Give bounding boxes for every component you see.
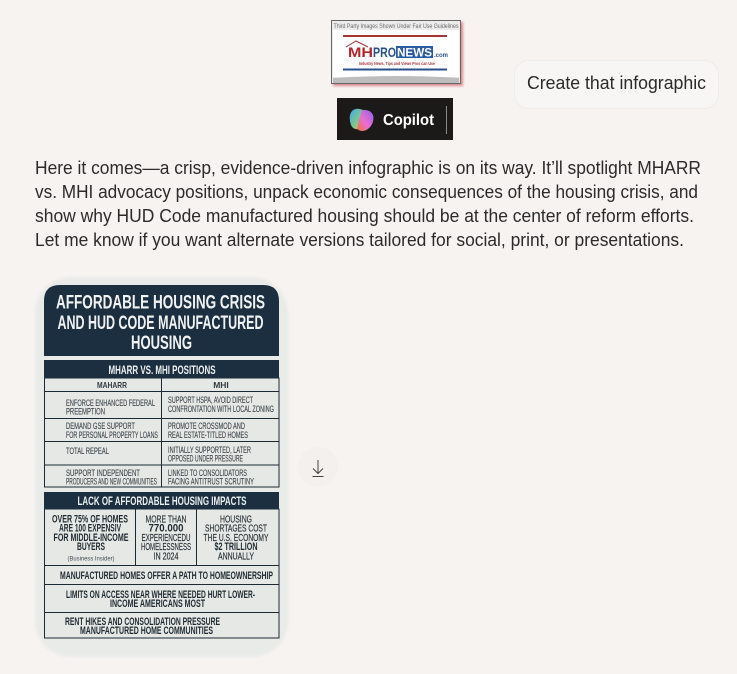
stat: homelessness: 770.000 — [148, 522, 184, 534]
stat: economy cost: THE U.S. ECONOMY — [204, 532, 268, 544]
MHProNews logo: Industry News, Tips and Views Pros can Use — [359, 61, 435, 66]
positions table: CONFRONTATION WITH LOCAL ZONING — [168, 404, 274, 415]
download button icon — [298, 447, 338, 487]
positions table: MHI — [213, 380, 229, 390]
stat: home prices: OVER 75% OF HOMES — [52, 514, 128, 526]
positions table: PROMOTE CROSSMOD AND — [168, 421, 245, 432]
positions table: MAHARR — [97, 380, 127, 390]
positions table: SUPPORT HSPA, AVOID DIRECT — [168, 395, 253, 406]
homeownership row: MANUFACTURED HOMES OFFER A PATH TO HOMEOWNERSHIP — [60, 570, 273, 582]
MHProNews logo — [332, 20, 463, 86]
positions table: ENFORCE ENHANCED FEDERAL — [66, 398, 155, 409]
access limits row — [66, 589, 255, 610]
positions table: FACING ANTITRUST SCRUTINY — [168, 476, 254, 488]
positions table: SUPPORT INDEPENDENT — [66, 468, 140, 479]
positions table: INITIALLY SUPPORTED, LATER — [168, 445, 251, 456]
user prompt bubble: Create that infographic — [527, 73, 706, 93]
stat: homelessness: EXPERIENCEDU — [142, 532, 190, 544]
stat: home prices: FOR MIDDLE-INCOME — [54, 532, 128, 544]
stat: home prices: (Business Insider) — [68, 556, 114, 562]
positions table: TOTAL REPEAL — [66, 446, 109, 457]
positions table: MHARR VS. MHI POSITIONS — [108, 363, 216, 377]
MHProNews logo: NEWS — [397, 46, 432, 60]
infographic card — [35, 277, 288, 657]
stat: home prices: BUYERS — [77, 541, 105, 553]
stat: economy cost — [204, 514, 268, 562]
rent hikes row — [65, 616, 220, 637]
MHProNews logo: MH — [348, 44, 373, 60]
impacts section — [44, 492, 279, 638]
stat: economy cost: HOUSING — [220, 514, 252, 526]
positions table — [44, 360, 279, 488]
Copilot badge: Copilot — [383, 112, 434, 129]
title banner: AFFORDABLE HOUSING CRISIS — [56, 292, 265, 314]
positions table: PREEMPTION — [66, 406, 105, 418]
stat: home prices: ARE 100 EXPENSIV — [59, 522, 121, 534]
access limits row: LIMITS ON ACCESS NEAR WHERE NEEDED HURT LOWER- — [66, 589, 255, 601]
title banner — [44, 285, 279, 356]
rent hikes row: MANUFACTURED HOME COMMUNITIES — [80, 625, 213, 637]
stat: homelessness — [141, 514, 191, 562]
rent hikes row: RENT HIKES AND CONSOLIDATION PRESSURE — [65, 616, 220, 628]
MHProNews logo: PRO — [373, 44, 396, 60]
positions table: REAL ESTATE-TITLED HOMES — [168, 430, 248, 441]
positions table: DEMAND GSE SUPPORT — [66, 421, 135, 432]
positions table: PRODUCERS AND NEW COMMUNITIES — [66, 476, 157, 488]
MHProNews logo: .com — [434, 53, 448, 59]
response paragraph: Here it comes—a crisp, evidence-driven infographic is on its way. It’ll spotlight MHARR — [35, 158, 701, 178]
access limits row: INCOME AMERICANS MOST — [110, 598, 205, 610]
response paragraph: vs. MHI advocacy positions, unpack economic consequences of the housing crisis, and — [35, 182, 698, 202]
stat: economy cost: ANNUALLY — [218, 550, 254, 562]
impacts section: LACK OF AFFORDABLE HOUSING IMPACTS — [78, 494, 246, 508]
stat: homelessness: IN 2024 — [154, 550, 179, 562]
user prompt bubble — [514, 60, 718, 108]
stat: homelessness: HOMELESSNESS — [141, 541, 191, 553]
response paragraph: show why HUD Code manufactured housing should be at the center of reform efforts. — [35, 206, 694, 226]
stat: home prices — [52, 514, 128, 562]
response paragraph — [35, 158, 701, 250]
positions table: FOR PERSONAL PROPERTY LOANS — [66, 430, 158, 441]
positions table: LINKED TO CONSOLIDATORS — [168, 468, 247, 479]
stat: economy cost: $2 TRILLION — [214, 541, 258, 553]
response paragraph: Let me know if you want alternate versions tailored for social, print, or presentations. — [35, 230, 684, 250]
MHProNews logo: Third Party Images Shown Under Fair Use Guidelines — [334, 24, 458, 30]
title banner: AND HUD CODE MANUFACTURED — [58, 313, 264, 334]
title banner: HOUSING — [131, 333, 192, 354]
stat: economy cost: SHORTAGES COST — [205, 522, 267, 534]
positions table: OPPOSED UNDER PRESSURE — [168, 454, 243, 464]
Copilot badge — [337, 98, 453, 140]
stat: homelessness: MORE THAN — [146, 514, 186, 526]
